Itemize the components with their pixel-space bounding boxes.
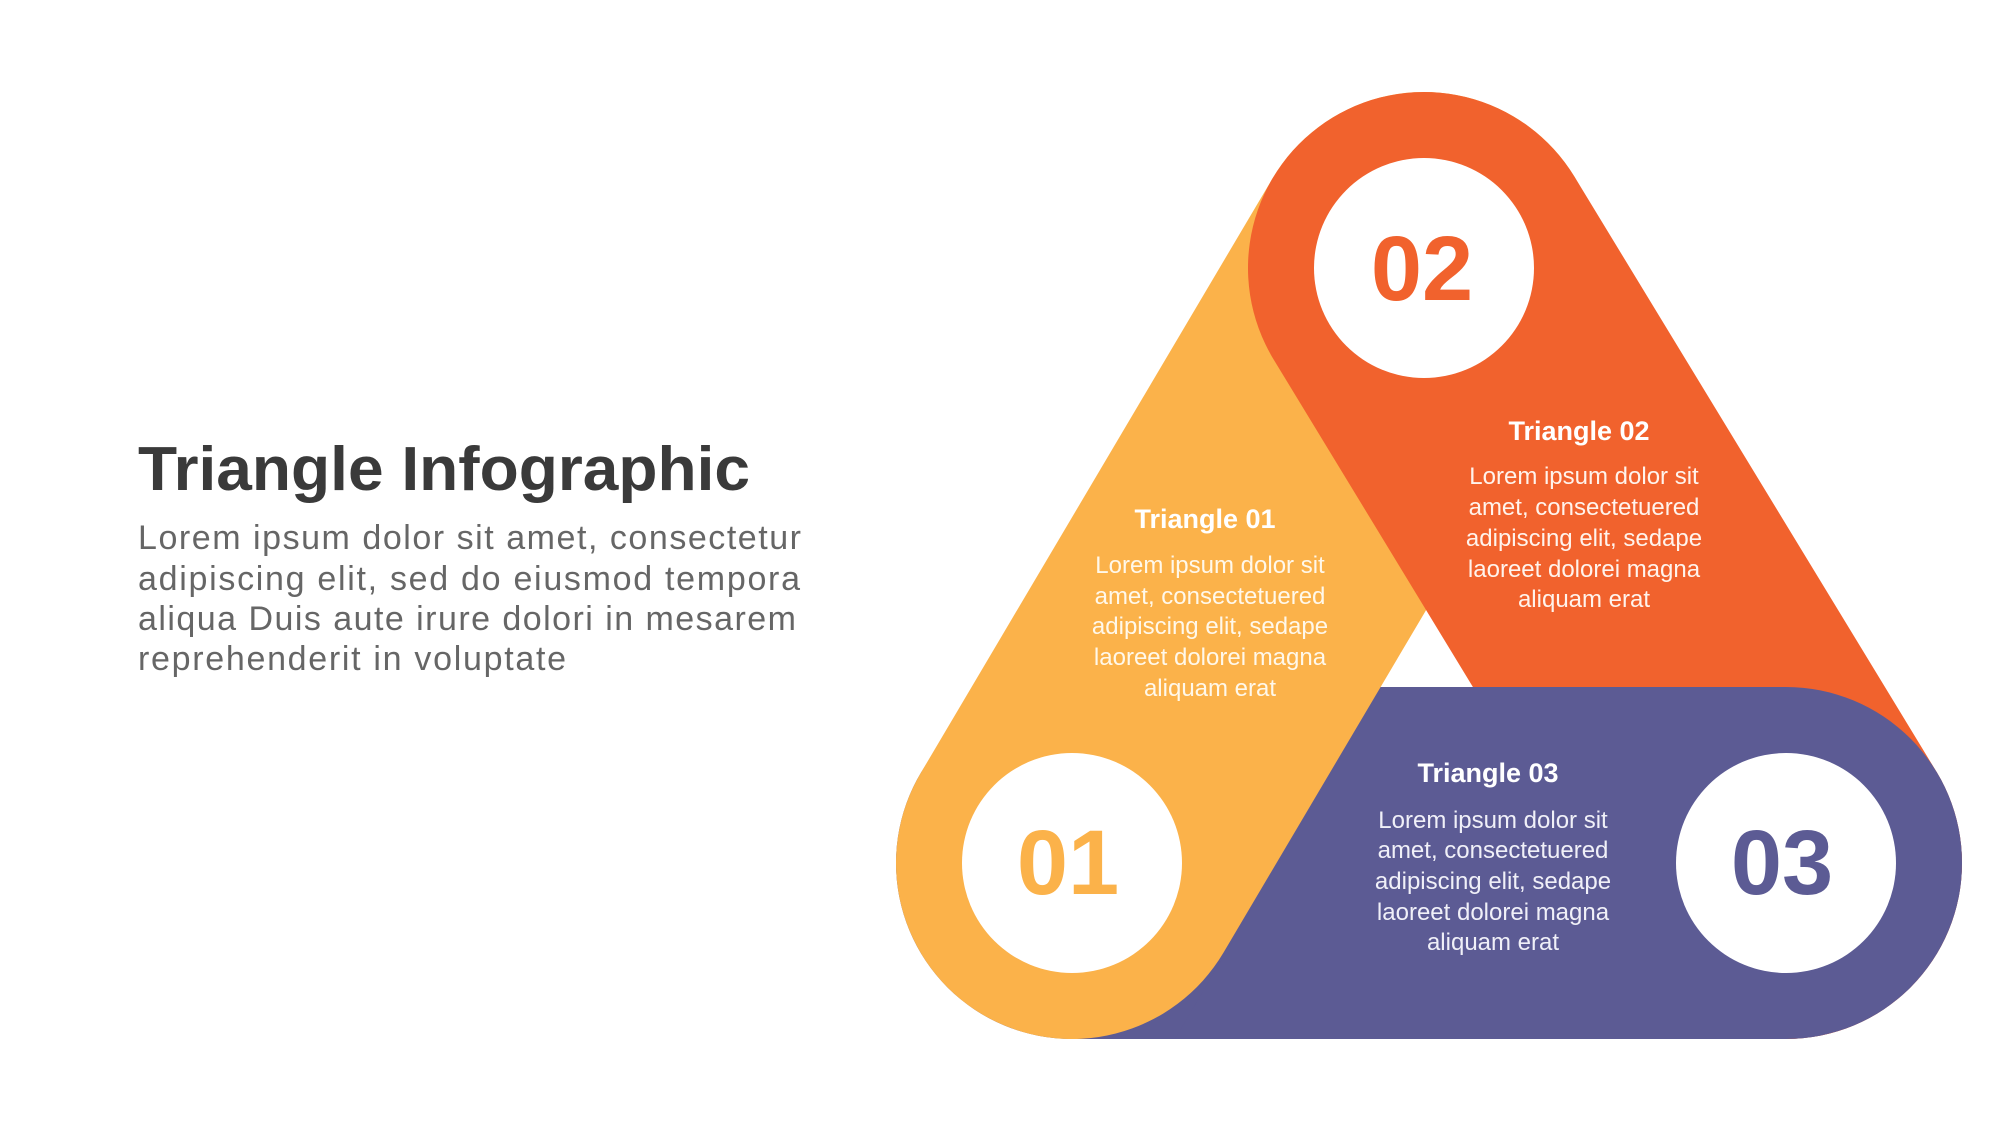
band: purple overlap xyxy=(1473,687,1962,1039)
text: triangle 03: laoreet dolorei magna xyxy=(1377,899,1610,926)
text: triangle 01: aliquam erat xyxy=(1144,675,1276,702)
text: triangle 02 xyxy=(1466,416,1702,613)
text: triangle 03 xyxy=(1375,758,1611,956)
text: triangle 02: Lorem ipsum dolor sit xyxy=(1469,463,1699,490)
circle 01 xyxy=(962,753,1182,973)
text: triangle 02: adipiscing elit, sedape xyxy=(1466,525,1702,552)
circle 02 xyxy=(1314,158,1534,378)
text: triangle 03: amet, consectetuered xyxy=(1378,837,1608,864)
circle 03: 03 xyxy=(1731,812,1833,914)
intro text xyxy=(138,519,801,678)
text: triangle 01: adipiscing elit, sedape xyxy=(1092,613,1328,640)
band: yellow xyxy=(1072,268,1424,863)
text: triangle 02: Triangle 02 xyxy=(1508,416,1650,446)
band: purple xyxy=(1072,687,1786,1039)
circle 03 xyxy=(1676,753,1896,973)
text: triangle 01: laoreet dolorei magna xyxy=(1094,644,1327,671)
text: triangle 01 xyxy=(1092,504,1328,702)
circle 01: 01 xyxy=(1017,812,1119,914)
text: triangle 03: Triangle 03 xyxy=(1417,758,1559,788)
title: Triangle Infographic xyxy=(138,435,750,504)
intro text: Lorem ipsum dolor sit amet, consectetur xyxy=(138,519,801,557)
text: triangle 02: amet, consectetuered xyxy=(1469,494,1699,521)
text: triangle 01: Triangle 01 xyxy=(1134,504,1276,534)
text: triangle 01: amet, consectetuered xyxy=(1095,583,1325,610)
text: triangle 02: laoreet dolorei magna xyxy=(1468,556,1701,583)
band: orange xyxy=(1424,268,1786,863)
text: triangle 03: Lorem ipsum dolor sit xyxy=(1378,807,1608,834)
intro text: adipiscing elit, sed do eiusmod tempora xyxy=(138,560,800,598)
text: triangle 03: aliquam erat xyxy=(1427,929,1559,956)
circle 02: 02 xyxy=(1371,218,1473,320)
intro text: aliqua Duis aute irure dolori in mesarem xyxy=(138,600,796,638)
text: triangle 03: adipiscing elit, sedape xyxy=(1375,868,1611,895)
text: triangle 01: Lorem ipsum dolor sit xyxy=(1095,552,1325,579)
intro text: reprehenderit in voluptate xyxy=(138,640,566,678)
text: triangle 02: aliquam erat xyxy=(1518,586,1650,613)
